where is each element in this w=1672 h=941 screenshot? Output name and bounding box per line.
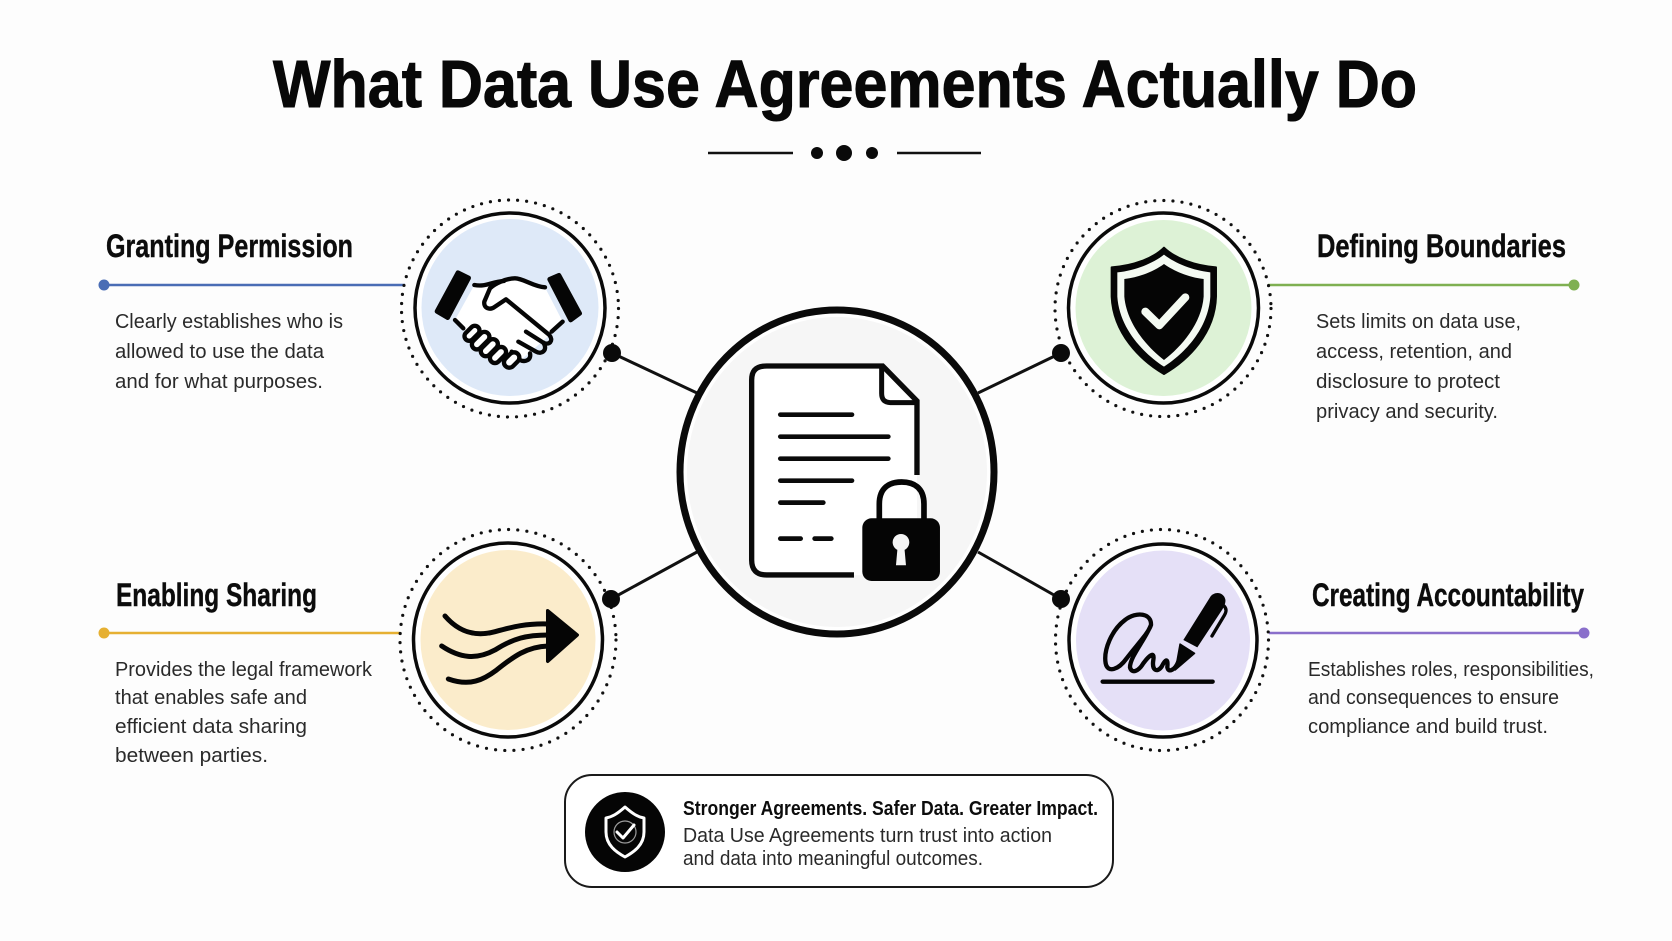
icon: handshake circle [402, 200, 618, 417]
connector nodes [602, 344, 1070, 608]
title divider [708, 145, 981, 161]
icon: shield circle [1055, 200, 1271, 416]
title: What Data Use Agreements Actually Do [273, 47, 1417, 122]
icon: shield badge [585, 792, 665, 872]
accent line: yellow [98, 628, 400, 638]
icon: signature circle [1056, 530, 1268, 750]
heading: defining boundaries: Defining Boundaries [1317, 228, 1566, 264]
description: granting permission: allowed to use the data [115, 341, 325, 363]
description: creating accountability: compliance and build trust. [1308, 716, 1548, 738]
description: creating accountability: Establishes roles, responsibilities, [1308, 659, 1594, 681]
description: creating accountability [1308, 659, 1594, 738]
description: defining boundaries: Sets limits on data use, [1316, 311, 1521, 333]
callout body [683, 825, 1052, 870]
panel: granting permission text [98, 228, 405, 393]
description: defining boundaries: privacy and security. [1316, 401, 1498, 423]
callout heading: Stronger Agreements. Safer Data. Greater Impact. [683, 798, 1098, 820]
heading: granting permission: Granting Permission [106, 228, 353, 264]
accent line: purple [1269, 628, 1590, 638]
icon: handshake [437, 273, 580, 370]
description: defining boundaries [1316, 311, 1521, 423]
description: defining boundaries: disclosure to protect [1316, 371, 1500, 393]
panel: defining boundaries text [1268, 228, 1580, 423]
accent line: green [1268, 280, 1580, 290]
accent line: blue [98, 280, 405, 290]
callout body: and data into meaningful outcomes. [683, 848, 983, 870]
panel: enabling sharing text [98, 577, 400, 767]
description: enabling sharing [115, 659, 373, 767]
callout: bottom summary [565, 775, 1113, 887]
description: granting permission: and for what purposes. [115, 371, 323, 393]
description: defining boundaries: access, retention, and [1316, 341, 1512, 363]
description: enabling sharing: between parties. [115, 745, 268, 767]
panel: central document circle [680, 310, 994, 634]
icon: pen signature [1103, 593, 1226, 682]
description: creating accountability: and consequences to ensure [1308, 687, 1559, 709]
heading: enabling sharing: Enabling Sharing [116, 577, 317, 613]
description: enabling sharing: that enables safe and [115, 687, 307, 709]
panel: creating accountability text [1269, 577, 1594, 738]
callout body: Data Use Agreements turn trust into action [683, 825, 1052, 847]
icon: flowing arrow [442, 611, 577, 682]
heading: creating accountability: Creating Accountability [1312, 577, 1584, 613]
description: enabling sharing: Provides the legal framework [115, 659, 373, 681]
icon: document with lock [752, 366, 940, 581]
connector lines [611, 353, 1061, 599]
icon: sharing circle [400, 530, 616, 750]
description: enabling sharing: efficient data sharing [115, 716, 307, 738]
icon: shield with check [1112, 248, 1216, 374]
description: granting permission [115, 311, 343, 393]
description: granting permission: Clearly establishes who is [115, 311, 343, 333]
